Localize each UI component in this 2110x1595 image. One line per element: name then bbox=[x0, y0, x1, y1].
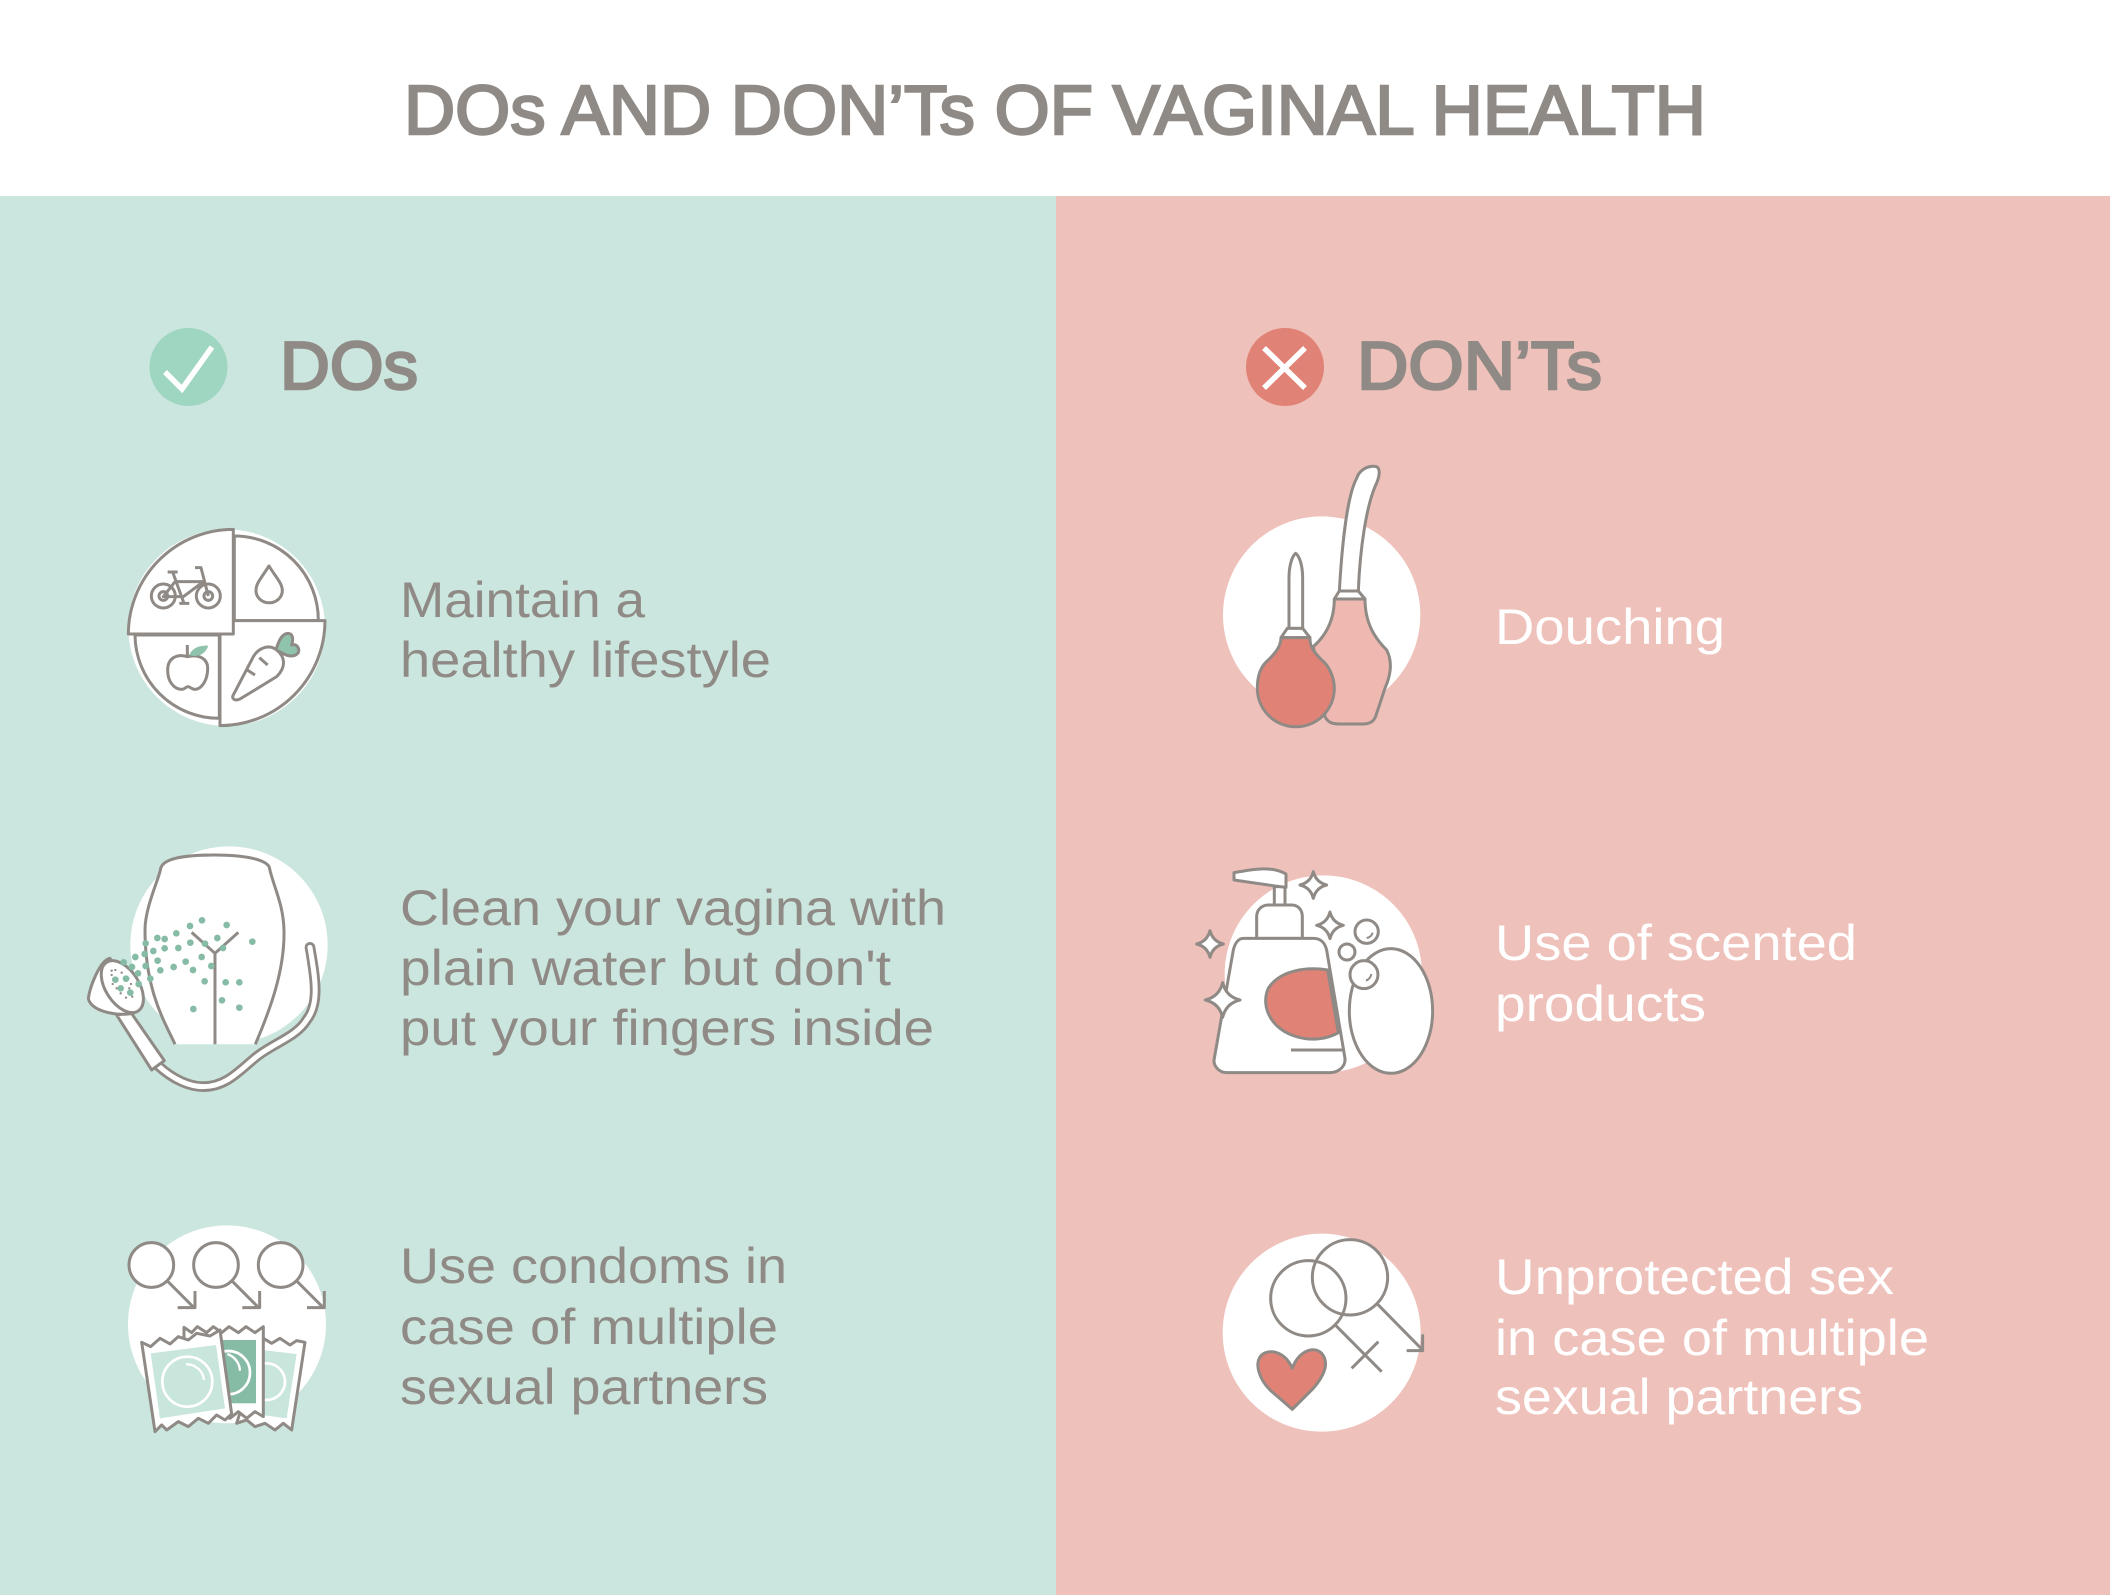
text: clean your vagina: Clean your vagina with bbox=[400, 880, 946, 936]
icon: check mark badge bbox=[150, 328, 228, 406]
text: unprotected sex: sexual partners bbox=[1495, 1369, 1863, 1425]
icon: scented soap bottle bbox=[1197, 869, 1433, 1073]
text: scented products bbox=[1495, 915, 1857, 1032]
icon: gender symbols and heart bbox=[1223, 1234, 1423, 1432]
text: douching: Douching bbox=[1495, 599, 1725, 655]
text: clean your vagina bbox=[400, 880, 946, 1056]
icon: cross badge bbox=[1246, 328, 1324, 406]
panel: donts bbox=[1056, 196, 2110, 1595]
text: clean your vagina: put your fingers inside bbox=[400, 1000, 934, 1056]
text: scented products: products bbox=[1495, 976, 1706, 1032]
text: use condoms bbox=[400, 1238, 787, 1415]
text: use condoms: sexual partners bbox=[400, 1359, 768, 1415]
title: DOs AND DON’Ts OF VAGINAL HEALTH bbox=[404, 71, 1706, 149]
text: unprotected sex bbox=[1495, 1249, 1929, 1425]
text: maintain a healthy lifestyle bbox=[400, 572, 771, 688]
text: scented products: Use of scented bbox=[1495, 915, 1857, 971]
icon: douching bulbs bbox=[1223, 466, 1420, 727]
heading: donts: DON’Ts bbox=[1357, 328, 1602, 404]
text: maintain a healthy lifestyle: healthy lifestyle bbox=[400, 632, 771, 688]
heading: dos: DOs bbox=[280, 328, 418, 404]
text: unprotected sex: in case of multiple bbox=[1495, 1310, 1929, 1366]
icon: healthy lifestyle plate bbox=[128, 529, 325, 726]
text: clean your vagina: plain water but don't bbox=[400, 940, 891, 996]
icon: shower and body bbox=[88, 846, 328, 1087]
text: maintain a healthy lifestyle: Maintain a bbox=[400, 572, 645, 628]
text: use condoms: case of multiple bbox=[400, 1299, 778, 1355]
text: use condoms: Use condoms in bbox=[400, 1238, 787, 1294]
icon: male symbols and condoms bbox=[128, 1225, 326, 1432]
panel: dos bbox=[0, 196, 1056, 1595]
text: unprotected sex: Unprotected sex bbox=[1495, 1249, 1894, 1305]
